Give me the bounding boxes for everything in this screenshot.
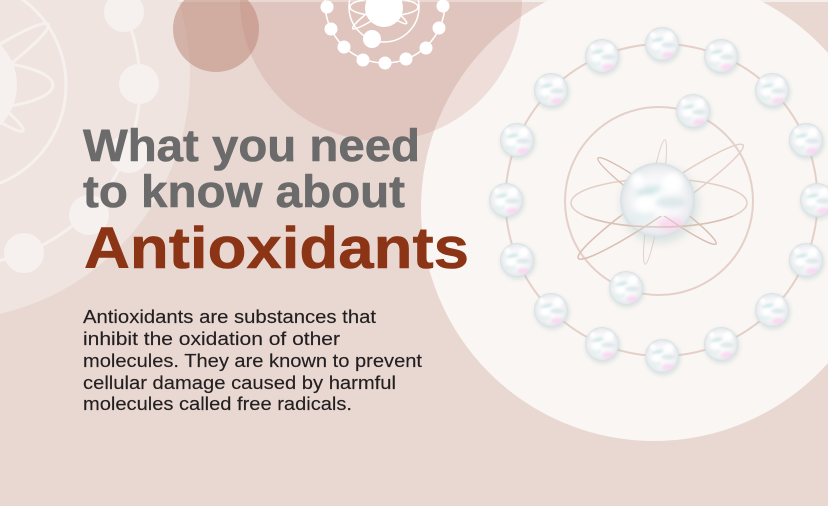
inner electron pearls <box>609 94 712 308</box>
antioxidant molecule <box>489 27 828 376</box>
title line 2: to know about <box>83 166 405 217</box>
orbit lines over nucleus <box>577 216 734 260</box>
large white circle at right <box>421 0 828 441</box>
description text: inhibit the oxidation of other <box>83 329 340 349</box>
large pale circle at left <box>0 0 190 320</box>
top light strip <box>0 0 828 2</box>
description text <box>83 307 422 414</box>
brown circle at top <box>173 0 259 72</box>
title <box>83 120 469 281</box>
description text: molecules called free radicals. <box>83 394 352 414</box>
description text: Antioxidants are substances that <box>83 307 376 327</box>
faded molecule at left <box>0 0 159 273</box>
nucleus pearl <box>620 163 698 243</box>
description text: molecules. They are known to prevent <box>83 351 422 371</box>
description text: cellular damage caused by harmful <box>83 373 396 393</box>
title line 3: Antioxidants <box>84 216 469 281</box>
white molecule at top <box>320 0 450 70</box>
outer electron pearls <box>489 27 828 376</box>
orbit rings <box>506 44 818 356</box>
rose circle at top <box>240 0 522 141</box>
title line 1: What you need <box>83 120 420 171</box>
